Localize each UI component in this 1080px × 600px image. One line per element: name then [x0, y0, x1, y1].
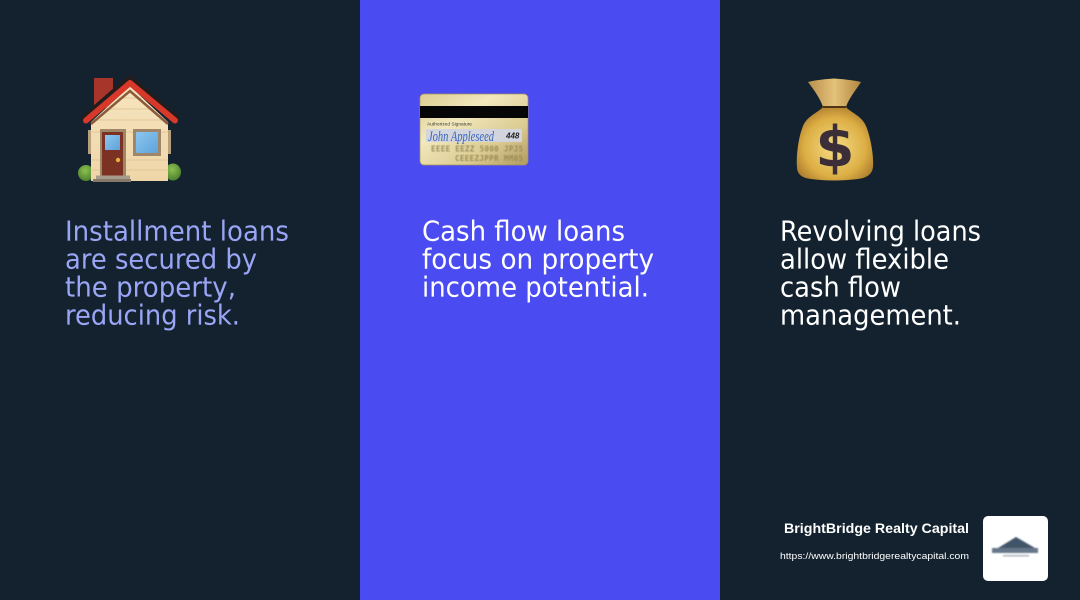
icon: credit card	[420, 94, 528, 165]
text: revolving loans: allow flexible	[780, 242, 949, 276]
icon: credit card: Authorized Signature	[427, 122, 472, 128]
logo card	[983, 516, 1048, 581]
text: installment loans: reducing risk.	[65, 298, 240, 332]
text: installment loans: Installment loans	[65, 214, 289, 248]
icon: credit card: John Appleseed	[428, 129, 494, 145]
company name: BrightBridge Realty Capital	[784, 521, 969, 536]
icon: credit card: CEEEZJPPR MM05	[455, 154, 523, 163]
text: cash flow loans: income potential.	[422, 270, 649, 304]
text: revolving loans: management.	[780, 298, 961, 332]
text: cash flow loans: focus on property	[422, 242, 654, 276]
icon: house	[78, 78, 181, 182]
text: installment loans	[65, 214, 289, 332]
text: revolving loans: cash flow	[780, 270, 901, 304]
icon: money bag	[797, 78, 873, 180]
icon: credit card: 448	[505, 132, 520, 140]
text: installment loans: are secured by	[65, 242, 257, 276]
text: installment loans: the property,	[65, 270, 236, 304]
website url: https://www.brightbridgerealtycapital.com	[780, 551, 969, 562]
panel: installment loans	[0, 0, 360, 600]
text: cash flow loans	[422, 214, 654, 304]
icon: money bag: $	[816, 115, 854, 180]
text: revolving loans: Revolving loans	[780, 214, 981, 248]
panel: cash flow loans	[360, 0, 720, 600]
text: cash flow loans: Cash flow loans	[422, 214, 625, 248]
text: revolving loans	[780, 214, 981, 332]
panel: revolving loans	[720, 0, 1080, 600]
icon: credit card: EEEE EEZZ 5000 JPJ5	[431, 144, 523, 154]
